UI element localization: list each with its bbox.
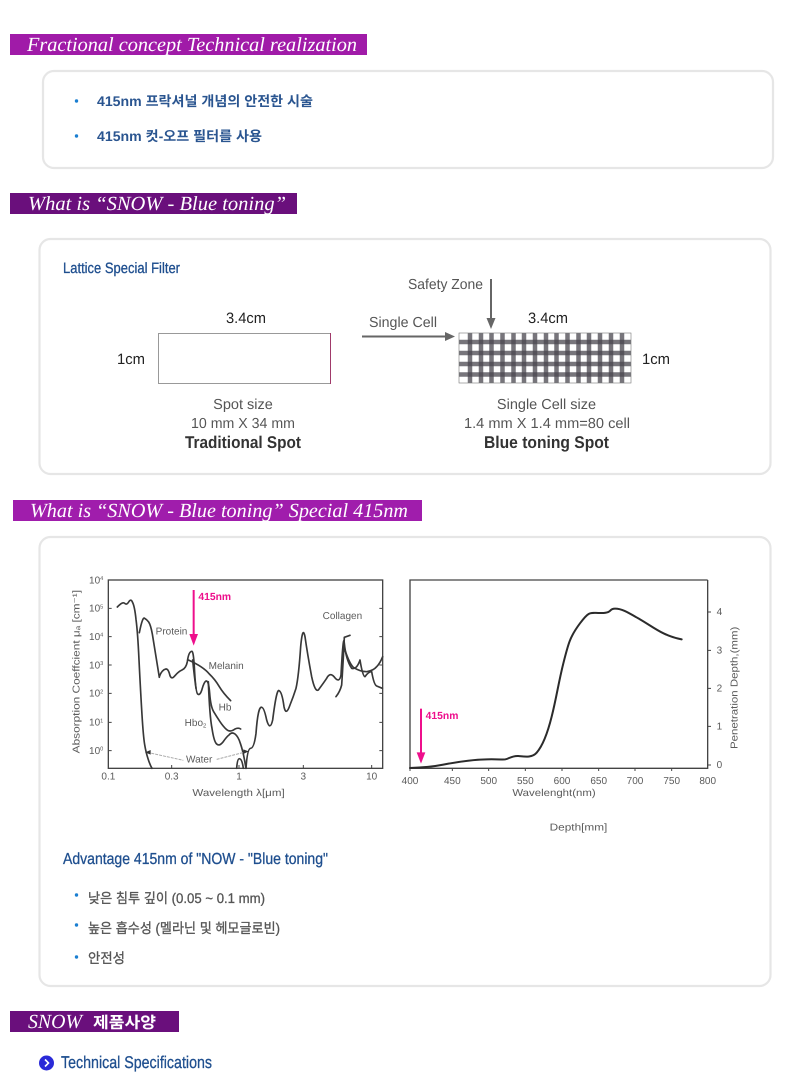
blue toning spot lattice: 1.4 mm X 1.4 mm=80 cell bbox=[464, 416, 630, 432]
chart: absorption coefficient: 10 bbox=[89, 717, 100, 728]
heading bar: SNOW specifications: 제품사양 bbox=[93, 1014, 156, 1032]
chart: absorption coefficient: 0 bbox=[100, 746, 103, 752]
chart: absorption coefficient: 10 bbox=[89, 603, 100, 614]
blue toning spot lattice bbox=[459, 310, 670, 452]
chart: absorption coefficient: 10 bbox=[89, 688, 100, 699]
chart: absorption coefficient: Absorption Coeffcient μₐ [cm⁻¹] bbox=[71, 590, 82, 753]
traditional spot diagram: 3.4cm bbox=[226, 310, 266, 327]
blue toning spot lattice: 3.4cm bbox=[528, 310, 568, 327]
arrow: single cell bbox=[362, 315, 455, 341]
panel: fractional concept bbox=[43, 71, 773, 168]
chart: absorption coefficient: 3 bbox=[301, 771, 306, 782]
chart: penetration depth: Depth[mm] bbox=[550, 822, 607, 833]
chart: penetration depth: 650 bbox=[590, 775, 607, 786]
chart: absorption coefficient: 1 bbox=[236, 771, 242, 782]
chart: penetration depth: 4 bbox=[717, 606, 722, 617]
chart: absorption coefficient: 5 bbox=[100, 603, 103, 610]
arrow: 415nm marker: 415nm bbox=[198, 591, 231, 602]
list: advantages: 낮은 침투 깊이 (0.05 ~ 0.1 mm) bbox=[88, 890, 265, 906]
panel: lattice special filter bbox=[40, 239, 770, 474]
sub heading: Technical Specifications: Technical Specifications bbox=[61, 1053, 212, 1072]
chart: absorption coefficient: Water bbox=[186, 754, 212, 765]
panel heading: Lattice Special Filter: Lattice Special Filter bbox=[63, 260, 180, 277]
chart: absorption coefficient: 10 bbox=[89, 660, 100, 671]
chart: absorption coefficient: 10 bbox=[89, 745, 100, 756]
arrow: safety zone: Safety Zone bbox=[408, 277, 483, 293]
chart: absorption coefficient: Hb bbox=[219, 702, 231, 713]
chart: penetration depth: 3 bbox=[717, 645, 722, 656]
chart: absorption coefficient: 1 bbox=[100, 717, 103, 724]
traditional spot diagram: 10 mm X 34 mm bbox=[191, 416, 295, 432]
blue toning spot lattice: 1cm bbox=[642, 351, 670, 368]
chart: penetration depth: 550 bbox=[517, 775, 534, 786]
panel: fractional concept: 415nm 프락셔널 개념의 안전한 시술 bbox=[97, 93, 313, 109]
chart: absorption coefficient: 4 bbox=[100, 632, 103, 638]
chart: penetration depth: 2 bbox=[717, 683, 722, 694]
traditional spot diagram: 1cm bbox=[117, 351, 145, 368]
list: advantages: 안전성 bbox=[88, 950, 125, 966]
chart: absorption coefficient: Wavelength λ[μm] bbox=[192, 787, 285, 798]
chart: absorption coefficient: Hbo bbox=[185, 717, 203, 728]
chart: absorption coefficient: 4 bbox=[100, 575, 103, 581]
chart: penetration depth: 0 bbox=[717, 759, 722, 770]
chart: absorption coefficient: Collagen bbox=[323, 610, 362, 621]
chart: penetration depth: 700 bbox=[627, 775, 643, 786]
traditional spot diagram: Spot size bbox=[213, 397, 273, 413]
chart: penetration depth bbox=[402, 580, 740, 833]
traditional spot diagram bbox=[117, 310, 330, 452]
heading bar: Fractional concept: Fractional concept Technical realization bbox=[26, 34, 357, 56]
chart: penetration depth: 750 bbox=[663, 775, 680, 786]
chart: penetration depth: 500 bbox=[480, 775, 497, 786]
heading bar: SNOW specifications: SNOW bbox=[28, 1011, 84, 1033]
arrow: safety zone bbox=[408, 277, 496, 329]
heading bar: Special 415nm: What is “SNOW - Blue toning” Special 415nm bbox=[30, 500, 408, 522]
chart: penetration depth: 450 bbox=[444, 775, 461, 786]
chart: penetration depth: 800 bbox=[699, 775, 716, 786]
blue toning spot lattice: Single Cell size bbox=[497, 397, 596, 413]
list: advantages bbox=[75, 890, 280, 966]
chart: penetration depth: Penetration Depth,(mm) bbox=[729, 627, 740, 749]
chart: absorption coefficient: 2 bbox=[203, 722, 206, 729]
traditional spot diagram: Traditional Spot bbox=[185, 433, 301, 452]
sub heading: Advantage 415nm: Advantage 415nm of "NOW - "Blue toning" bbox=[63, 851, 328, 868]
chart: absorption coefficient: Protein bbox=[156, 626, 187, 637]
chart: absorption coefficient bbox=[71, 575, 383, 798]
chart: absorption coefficient: 10 bbox=[366, 771, 377, 782]
arrow: 415nm marker bbox=[417, 709, 458, 764]
panel: fractional concept: 415nm 컷-오프 필터를 사용 bbox=[97, 128, 262, 144]
heading bar: SNOW specifications bbox=[10, 1011, 179, 1033]
chart: penetration depth: 400 bbox=[402, 775, 418, 786]
blue toning spot lattice: Blue toning Spot bbox=[484, 433, 609, 452]
chart: penetration depth: 1 bbox=[717, 721, 722, 732]
chart: penetration depth: Wavelenght(nm) bbox=[512, 787, 596, 798]
chart: absorption coefficient: 10 bbox=[89, 631, 100, 642]
list: advantages: 높은 흡수성 (멜라닌 및 헤모글로빈) bbox=[88, 920, 280, 936]
heading bar: What is SNOW: What is “SNOW - Blue toning” bbox=[28, 193, 286, 215]
chart: penetration depth: 600 bbox=[554, 775, 570, 786]
chart: absorption coefficient: 0.3 bbox=[165, 771, 179, 782]
chart: absorption coefficient: 0.1 bbox=[101, 771, 115, 782]
arrow: 415nm marker: 415nm bbox=[426, 710, 458, 721]
chart: absorption coefficient: 3 bbox=[100, 660, 103, 666]
chart: absorption coefficient: 10 bbox=[89, 575, 100, 586]
arrow: 415nm marker bbox=[189, 590, 231, 646]
arrow: single cell: Single Cell bbox=[369, 315, 437, 331]
chart: absorption coefficient: 2 bbox=[100, 688, 103, 695]
panel: special 415nm bbox=[40, 537, 770, 986]
chart: absorption coefficient: Melanin bbox=[209, 660, 244, 671]
